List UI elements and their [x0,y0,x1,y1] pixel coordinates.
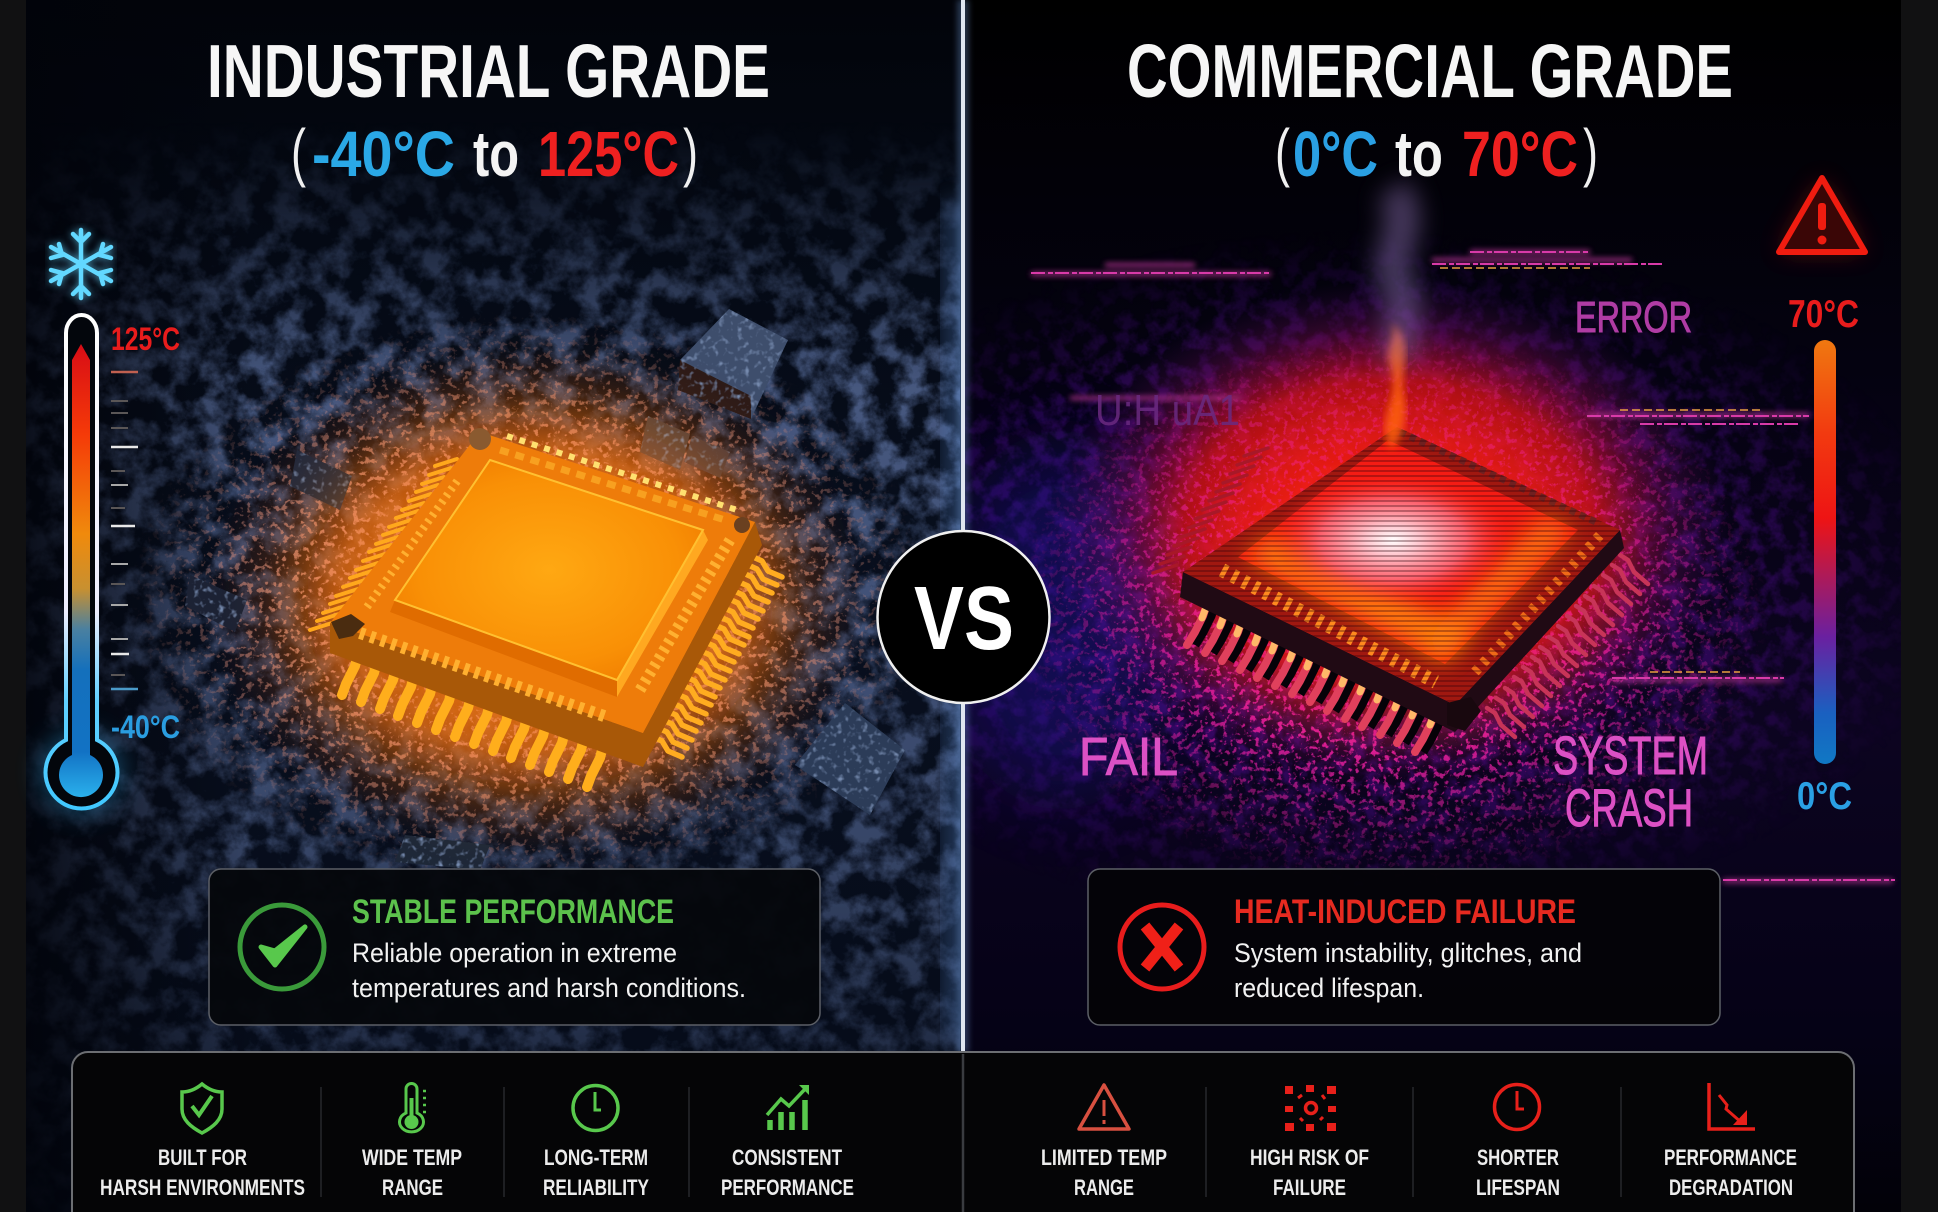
glitch words [1079,293,1708,838]
glitch words: CRASH [1565,779,1693,838]
feature: performance degradation: PERFORMANCE [1664,1145,1797,1170]
chip pins: top-left pad row [310,459,457,630]
failing chip die and hot spot [1238,440,1578,664]
feature: consistent performance: PERFORMANCE [721,1175,854,1200]
feature: shorter lifespan [1476,1084,1560,1200]
range: -40C to 125C [291,116,698,190]
left chip: glowing industrial processor [305,415,782,787]
failing chip pins: bottom-left row [1187,610,1433,752]
icon: warning triangle [1779,178,1865,252]
range: 0C to 70C: ( [1275,116,1290,188]
feature: performance degradation: DEGRADATION [1669,1175,1793,1200]
callout: stable performance: STABLE PERFORMANCE [352,893,674,931]
title: industrial grade [207,29,770,190]
feature: limited temp range: LIMITED TEMP [1041,1145,1167,1170]
feature: high risk of failure: FAILURE [1273,1175,1346,1200]
callout: heat-induced failure [1088,869,1720,1025]
feature: shorter lifespan: SHORTER [1477,1145,1559,1170]
icon: x circle [1120,905,1204,989]
thermometer tick marks [111,371,138,373]
feature: high risk of failure: HIGH RISK OF [1250,1145,1369,1170]
feature: shorter lifespan: LIFESPAN [1476,1175,1560,1200]
failing chip package [1183,427,1620,705]
title: commercial grade [1127,29,1733,190]
feature: limited temp range [1041,1085,1167,1200]
feature: long-term reliability: RELIABILITY [543,1175,649,1200]
right chip: overheating commercial processor [1031,190,1895,881]
title: industrial grade: INDUSTRIAL GRADE [207,29,770,113]
callout: stable performance [209,869,820,1025]
thermometer: -40C to 125C [39,315,180,814]
thermometer labels: 125°C [111,321,180,357]
panel: industrial grade background [26,0,964,1212]
chip pins: bottom-right row [653,557,782,757]
panel: feature strip [72,1052,1854,1212]
VS badge: VS [914,569,1014,669]
range: -40C to 125C: -40°C [312,118,455,190]
range: 0C to 70C: 70°C [1462,118,1578,190]
failing chip pins: bottom-right row [1487,555,1648,737]
range: -40C to 125C: 125°C [538,118,679,190]
feature: consistent performance: CONSISTENT [732,1145,842,1170]
feature: wide temp range [362,1084,462,1200]
callout: stable performance: temperatures and harsh conditions. [352,973,746,1003]
chip package side [330,522,762,767]
glitch words: FAIL [1079,727,1178,787]
range: 0C to 70C: 0°C [1293,118,1378,190]
center divider [957,0,969,1052]
feature: wide temp range: RANGE [382,1175,443,1200]
VS badge [878,531,1050,703]
chip package [330,432,755,733]
failing chip pin shadows [1195,610,1441,752]
callout: heat-induced failure: HEAT-INDUCED FAILURE [1234,893,1576,931]
callout: heat-induced failure: System instability, glitches, and [1234,938,1582,968]
chip corner marks [469,428,491,450]
feature: built for harsh environments [100,1084,305,1200]
range: -40C to 125C: to [473,118,519,190]
failing chip pins: top-left pad row [1153,448,1268,573]
glitch words: U:H uA1 [1095,386,1240,435]
callout: heat-induced failure: reduced lifespan. [1234,973,1424,1003]
feature: performance degradation [1664,1083,1797,1200]
icon: check circle [240,905,324,989]
glitch words: SYSTEM [1553,726,1708,786]
temperature bar: 0C to 70C: 70°C [1788,293,1859,336]
range: -40C to 125C: ) [683,116,698,188]
glitch words: ERROR [1575,293,1692,342]
flame and smoke [1385,323,1406,450]
feature: high risk of failure [1250,1085,1369,1200]
glitch streaks [1031,252,1893,881]
temperature bar: 0C to 70C: 0°C [1797,775,1852,818]
panel: commercial grade background [950,0,1901,1212]
range: 0C to 70C: to [1395,118,1443,190]
chip pins: bottom-left row [342,658,602,787]
feature: built for harsh environments: BUILT FOR [158,1145,247,1170]
range: -40C to 125C: ( [291,116,306,188]
feature: limited temp range: RANGE [1074,1175,1134,1200]
frosted components on the left board [185,309,905,870]
feature: long-term reliability [543,1086,649,1200]
callout: stable performance: Reliable operation in extreme [352,938,677,968]
failing chip package side [1180,530,1624,732]
thermometer: -40C to 125C: -40°C [111,709,180,745]
chip die [390,600,617,697]
feature: wide temp range: WIDE TEMP [362,1145,462,1170]
title: commercial grade: COMMERCIAL GRADE [1127,29,1733,113]
icon: snowflake [51,230,111,298]
temperature bar: 0C to 70C [1788,293,1859,818]
feature: built for harsh environments: HARSH ENVIRONMENTS [100,1175,305,1200]
range: 0C to 70C: ) [1583,116,1598,188]
feature: long-term reliability: LONG-TERM [544,1145,648,1170]
chip package decoration [507,436,737,510]
range: 0C to 70C [1275,116,1598,190]
feature: consistent performance [721,1085,854,1200]
